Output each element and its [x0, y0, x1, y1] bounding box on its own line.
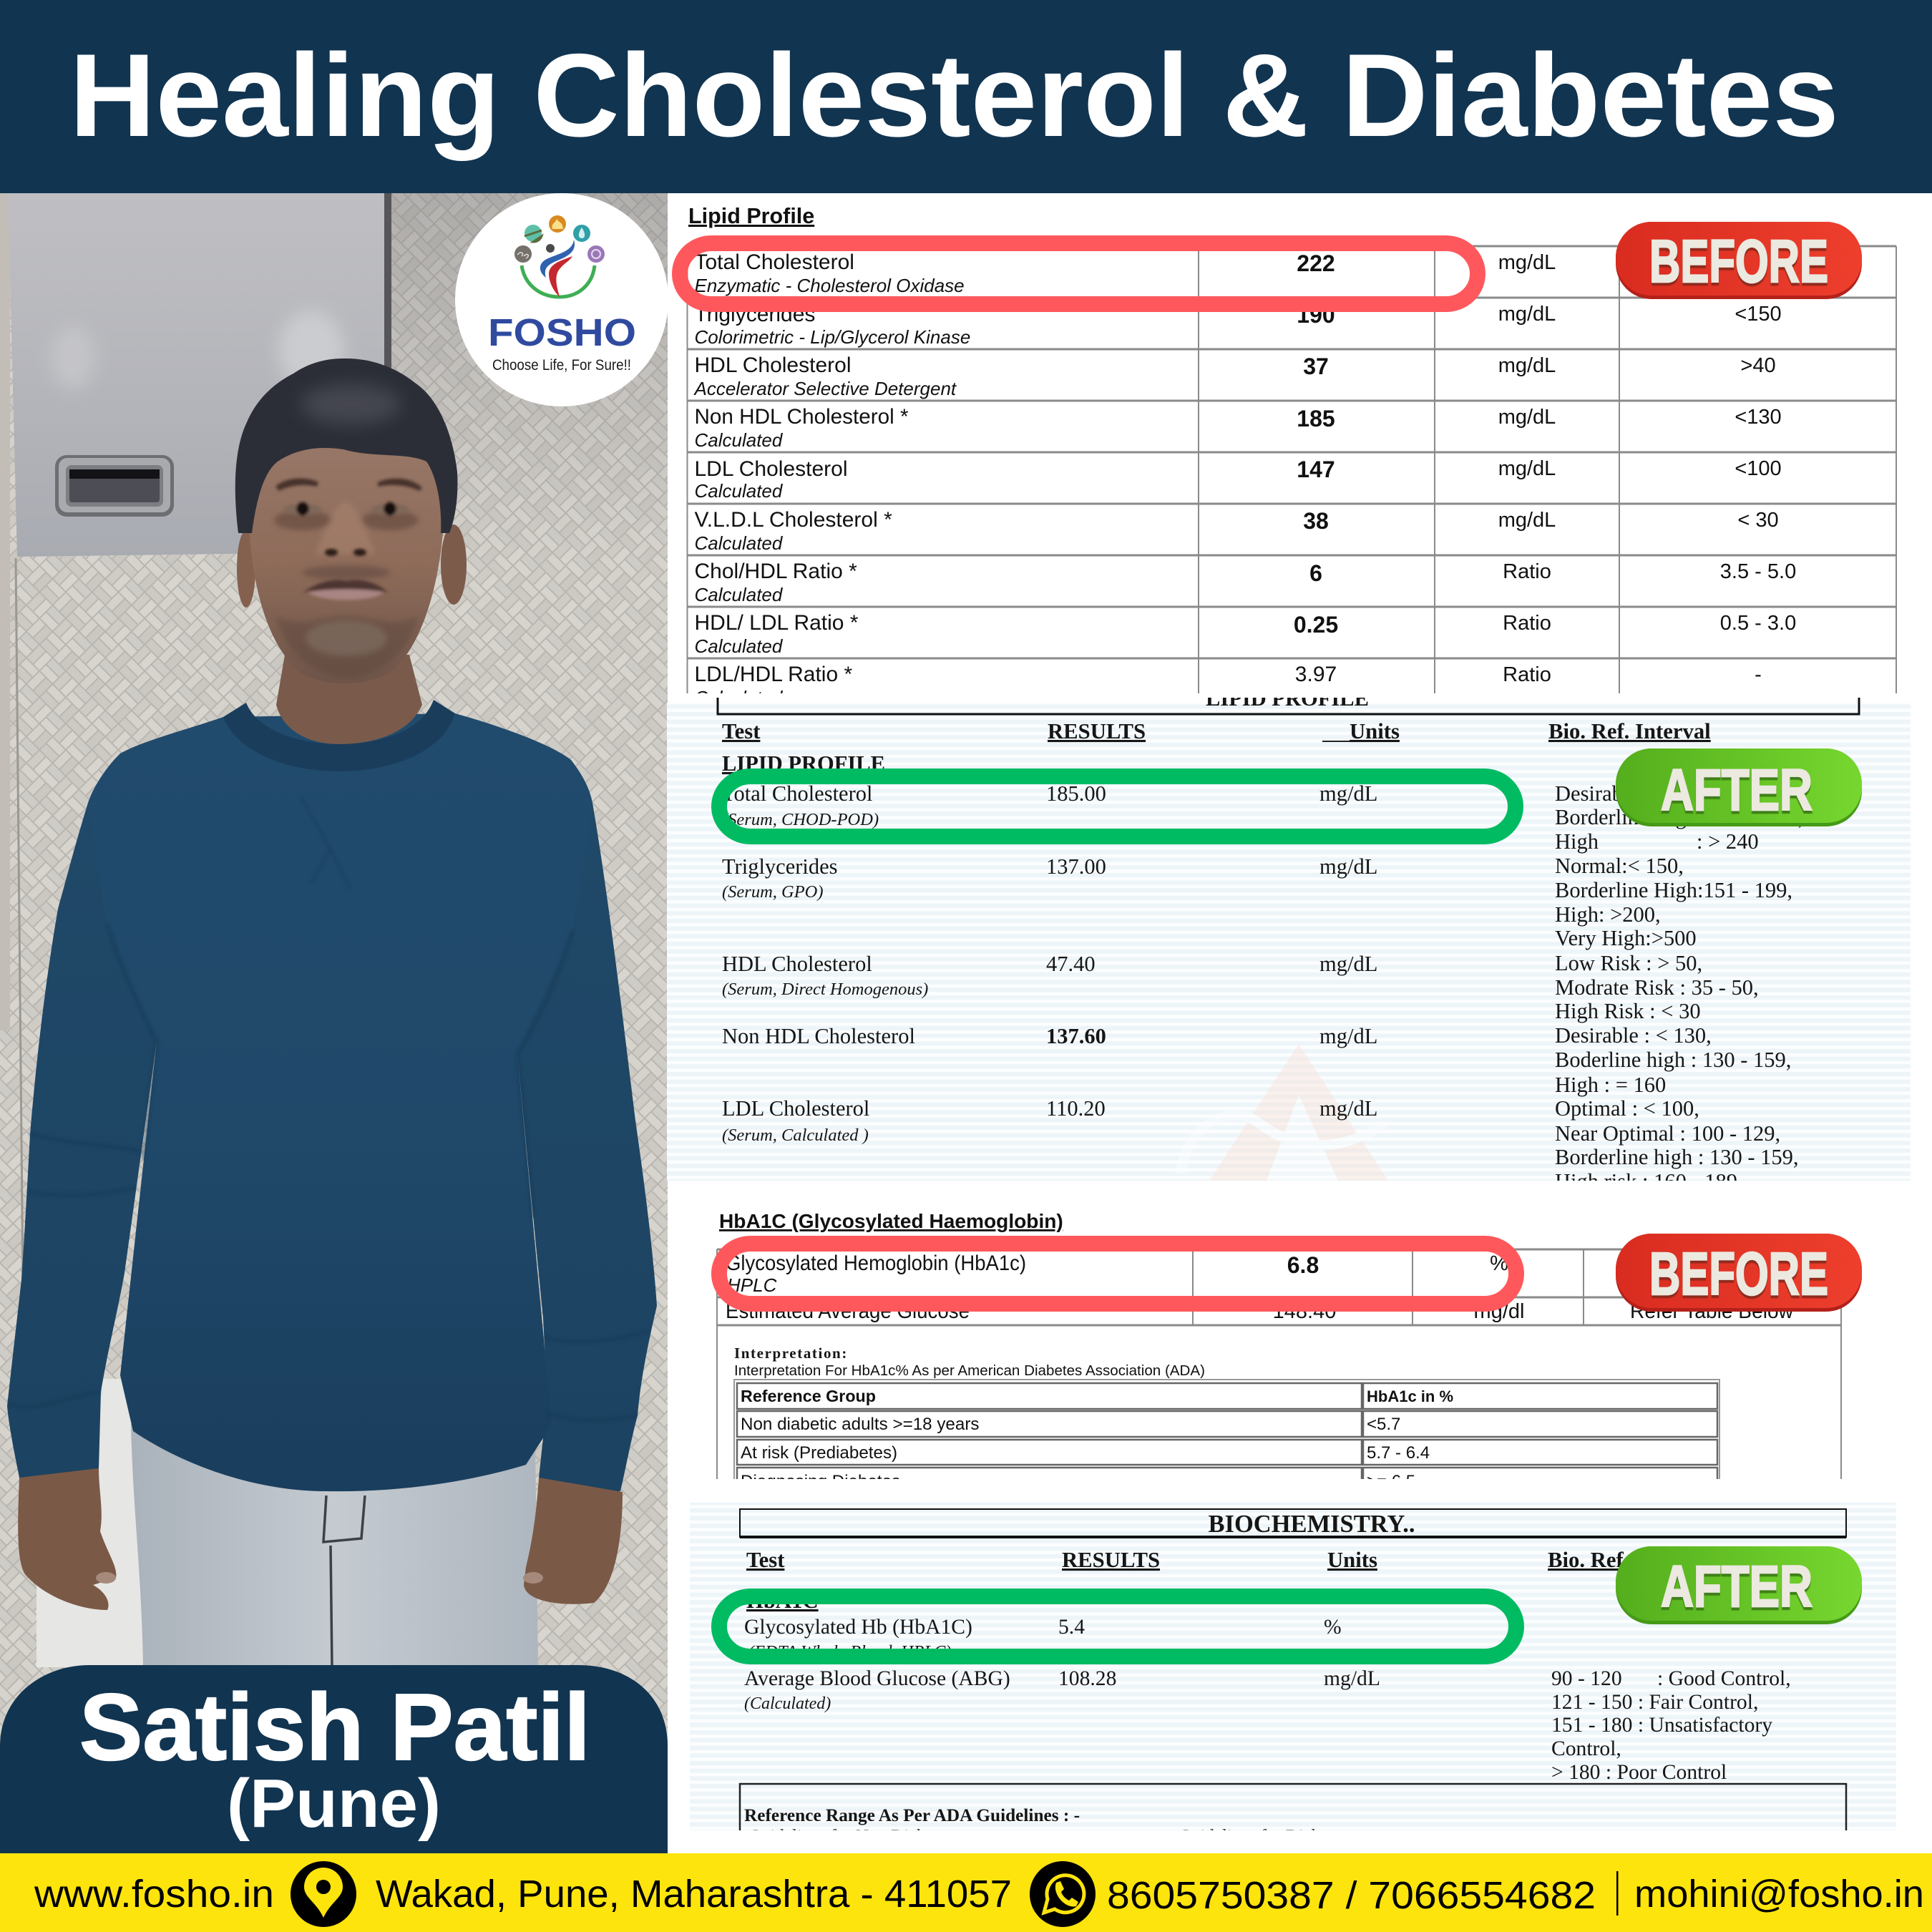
lipid rows: >40	[1740, 354, 1776, 377]
left wall strip	[0, 193, 10, 1030]
header banner	[0, 0, 1932, 193]
after lipid rows: (Serum, Direct Homogenous)	[722, 980, 928, 999]
after lipid rows: Non HDL Cholesterol	[722, 1024, 915, 1048]
lipid rows: <150	[1735, 303, 1782, 326]
after lipid rows	[722, 781, 1377, 1145]
interpretation table	[734, 1380, 1719, 1523]
after lipid rows: Total Cholesterol	[722, 781, 872, 806]
woven wall background	[0, 193, 668, 1853]
after HbA1c rows: 5.4	[1058, 1616, 1085, 1639]
after HbA1c reference intervals: : Good Control,	[1657, 1667, 1791, 1690]
after HbA1c rows	[744, 1616, 1380, 1713]
after HbA1c rows: Glycosylated Hb (HbA1C)	[744, 1616, 972, 1639]
after lipid rows: 110.20	[1046, 1096, 1106, 1121]
highlight ring: after total cholesterol	[719, 776, 1516, 836]
badge: after 2: AFTER	[1661, 1554, 1813, 1619]
after lipid rows: 185.00	[1046, 781, 1106, 806]
after lipid reference intervals: Low Risk : > 50,	[1555, 951, 1702, 975]
after HbA1c header: Bio. Ref. Interval	[1548, 1548, 1710, 1572]
cropped section title	[718, 686, 1859, 714]
nose	[325, 549, 366, 556]
website: www.fosho.in	[34, 1873, 274, 1916]
sweater collar	[223, 700, 455, 771]
badge: before 2: BEFORE	[1649, 1240, 1828, 1307]
after lipid table header: LIPID PROFILE	[722, 751, 885, 776]
after lipid rows: 137.60	[1046, 1024, 1106, 1048]
interpretation text: Interpretation For HbA1c% As per American Diabetes Association (ADA)	[734, 1363, 1205, 1379]
after HbA1c reference intervals	[1551, 1667, 1791, 1784]
cropped section title: LIPID PROFILE	[1206, 686, 1369, 711]
after lipid reference intervals: Normal:< 150,	[1555, 854, 1684, 878]
logo badge	[455, 193, 668, 406]
panel: before lipid report	[687, 204, 1896, 708]
door edge	[384, 193, 391, 369]
HbA1c rows: 148.40	[1273, 1300, 1336, 1323]
patient city: (Pune)	[227, 1765, 441, 1842]
jeans	[131, 1424, 538, 1667]
logo emblem	[514, 215, 605, 297]
sweater folds	[25, 850, 639, 1419]
biochemistry title box	[740, 1509, 1846, 1538]
email: mohini@fosho.in	[1634, 1873, 1924, 1916]
interpretation table: >= 6.5	[1367, 1472, 1415, 1491]
panel: patient name	[0, 1665, 668, 1853]
left wall seam	[14, 558, 24, 1277]
badge: after 1: AFTER	[1661, 758, 1813, 823]
logo tagline: Choose Life, For Sure!!	[492, 357, 631, 374]
interpretation table: Diagnosing Diabetes	[741, 1472, 900, 1491]
after lipid rows: Triglycerides	[722, 854, 838, 879]
badge: before 1	[1616, 222, 1862, 299]
panel: after HbA1c report	[690, 1503, 1896, 1846]
after lipid reference intervals: Borderline High:151 - 199,	[1555, 878, 1792, 902]
lipid rows: Chol/HDL Ratio *	[694, 560, 857, 583]
after lipid table header: RESULTS	[1048, 719, 1146, 743]
hair	[235, 358, 457, 533]
lipid rows: Calculated	[694, 532, 784, 554]
after lipid reference intervals: Modrate Risk : 35 - 50,	[1555, 975, 1759, 1000]
after HbA1c header	[746, 1548, 1710, 1613]
address: Wakad, Pune, Maharashtra - 411057	[376, 1873, 1012, 1916]
after lipid rows: mg/dL	[1319, 1024, 1377, 1048]
logo wordmark: FOSHO	[488, 311, 636, 354]
lipid rows: 147	[1297, 457, 1335, 482]
HbA1c rows: Glycosylated Hemoglobin (HbA1c)	[726, 1252, 1026, 1275]
neck	[276, 655, 422, 744]
after lipid reference intervals: High	[1555, 829, 1599, 854]
lipid rows: LDL Cholesterol	[694, 457, 847, 481]
after HbA1c header: Test	[746, 1548, 785, 1572]
lipid rows: mg/dL	[1498, 251, 1556, 274]
after lipid reference intervals: High risk : 160 - 189	[1555, 1169, 1737, 1194]
lipid rows: Triglycerides	[694, 303, 815, 326]
lipid rows: V.L.D.L Cholesterol *	[694, 508, 892, 532]
after lipid reference intervals	[1555, 781, 1803, 1194]
footer contact bar	[0, 1853, 1932, 1932]
lipid rows: mg/dL	[1498, 303, 1556, 326]
lipid rows	[693, 250, 1796, 708]
after lipid rows: (Serum, CHOD-POD)	[722, 810, 879, 829]
after HbA1c rows: Average Blood Glucose (ABG)	[744, 1667, 1010, 1690]
lipid rows: < 30	[1737, 509, 1779, 532]
after lipid reference intervals: High : = 160	[1555, 1073, 1666, 1097]
HbA1c rows: 6.8	[1287, 1252, 1319, 1278]
lipid rows: 185	[1297, 406, 1335, 431]
after HbA1c reference intervals: 90 - 120	[1551, 1667, 1622, 1690]
HbA1c rows: Estimated Average Glucose	[726, 1299, 970, 1323]
lipid rows: 222	[1297, 250, 1335, 276]
after lipid reference intervals: Very High:>500	[1555, 926, 1697, 950]
after HbA1c rows: %	[1324, 1616, 1342, 1639]
after lipid reference intervals: Borderline High : 200 - 239,	[1555, 805, 1803, 829]
biochemistry title box: BIOCHEMISTRY..	[1209, 1511, 1415, 1538]
lipid rows: HDL Cholesterol	[694, 353, 851, 377]
after HbA1c rows: 108.28	[1058, 1667, 1116, 1690]
lipid rows: mg/dL	[1498, 509, 1556, 532]
lipid rows: Ratio	[1503, 560, 1551, 583]
lipid rows: Calculated	[694, 429, 784, 451]
after lipid reference intervals: Boderline high : 130 - 159,	[1555, 1048, 1791, 1072]
lipid rows: Colorimetric - Lip/Glycerol Kinase	[694, 326, 970, 348]
interpretation text	[734, 1345, 1205, 1379]
after lipid rows: LDL Cholesterol	[722, 1096, 869, 1121]
after HbA1c header: Units	[1327, 1548, 1377, 1572]
after lipid rows: HDL Cholesterol	[722, 952, 872, 976]
HbA1c rows: Refer Table Below	[1630, 1300, 1794, 1323]
after HbA1c header: HbA1C	[746, 1589, 819, 1613]
after lipid rows: 137.00	[1046, 854, 1106, 879]
lipid rows: Calculated	[694, 480, 784, 502]
badge: before 2	[1616, 1234, 1862, 1312]
after lipid rows: mg/dL	[1319, 1096, 1377, 1121]
lipid rows: mg/dL	[1498, 406, 1556, 429]
after lipid rows: (Serum, Calculated )	[722, 1126, 869, 1145]
after lipid table header: Bio. Ref. Interval	[1548, 719, 1711, 743]
lipid rows: Ratio	[1503, 663, 1551, 686]
after HbA1c rows: mg/dL	[1324, 1667, 1380, 1690]
icon: whatsapp	[1030, 1861, 1096, 1927]
after lipid rows: mg/dL	[1319, 952, 1377, 976]
ADA guidelines box: Guidelines for Diabetes	[1179, 1827, 1348, 1846]
after lipid reference intervals: High Risk : < 30	[1555, 999, 1701, 1023]
left ear	[237, 530, 255, 608]
after lipid table header	[722, 719, 1711, 776]
phone numbers: 8605750387 / 7066554682	[1107, 1874, 1596, 1917]
lipid rows: 3.5 - 5.0	[1720, 560, 1796, 583]
lipid rows: 38	[1303, 508, 1329, 534]
title: Healing Cholesterol & Diabetes	[69, 29, 1839, 161]
after HbA1c reference intervals: 121 - 150 : Fair Control,	[1551, 1691, 1758, 1714]
highlight ring: after HbA1c	[719, 1596, 1516, 1657]
lipid rows: Non HDL Cholesterol *	[694, 405, 909, 429]
badge: before 1: BEFORE	[1649, 228, 1828, 295]
ADA guidelines box: Reference Range As Per ADA Guidelines : -	[744, 1805, 1080, 1825]
right hand	[523, 1478, 623, 1604]
door handle	[55, 455, 174, 517]
lipid rows: 37	[1303, 353, 1329, 379]
grey door panel	[8, 193, 384, 557]
after lipid table header: Test	[722, 719, 761, 743]
photo: patient portrait	[0, 193, 668, 1853]
lipid rows: Calculated	[694, 635, 784, 657]
after lipid rows: (Serum, GPO)	[722, 882, 824, 902]
lipid rows: Ratio	[1503, 612, 1551, 635]
interpretation text: Interpretation:	[734, 1345, 848, 1362]
lipid rows: -	[1755, 663, 1762, 686]
lower white door	[36, 1379, 155, 1667]
lipid rows: mg/dL	[1498, 354, 1556, 377]
sweater torso	[88, 713, 592, 1491]
after HbA1c reference intervals: > 180 : Poor Control	[1551, 1761, 1727, 1784]
lipid rows: 0.5 - 3.0	[1720, 612, 1796, 635]
after lipid reference intervals: Near Optimal : 100 - 129,	[1555, 1121, 1780, 1146]
HbA1c rows	[726, 1252, 1794, 1323]
after HbA1c header: RESULTS	[1062, 1548, 1160, 1572]
after lipid reference intervals: Borderline high : 130 - 159,	[1555, 1145, 1799, 1169]
HbA1c rows: mg/dl	[1474, 1300, 1524, 1323]
lipid rows: Enzymatic - Cholesterol Oxidase	[694, 275, 965, 296]
lipid rows: 3.97	[1295, 663, 1337, 686]
lipid rows: Total Cholesterol	[694, 250, 854, 274]
after HbA1c rows: (EDTA Whole Blood, HPLC)	[748, 1642, 952, 1662]
after lipid rows: mg/dL	[1319, 781, 1377, 806]
interpretation table: <5.7	[1367, 1415, 1400, 1434]
lipid rows: <130	[1735, 406, 1782, 429]
sweater right arm	[517, 803, 657, 1491]
after HbA1c reference intervals: 151 - 180 : Unsatisfactory	[1551, 1714, 1772, 1737]
ADA guidelines box	[740, 1784, 1846, 1846]
eyebrows	[275, 479, 422, 491]
right eye	[371, 502, 409, 515]
lipid rows: 6	[1309, 560, 1322, 586]
highlight ring: before HbA1c	[719, 1244, 1516, 1304]
interpretation table: At risk (Prediabetes)	[741, 1443, 897, 1463]
left eye	[284, 502, 321, 515]
HbA1c rows: %	[1490, 1252, 1508, 1275]
after lipid table header: Units	[1350, 719, 1400, 743]
interpretation table: HbA1c in %	[1367, 1387, 1453, 1405]
wall tone top right	[391, 193, 668, 484]
icon: location pin	[291, 1861, 356, 1927]
highlight ring: before total cholesterol	[680, 243, 1478, 304]
lipid rows: Calculated	[694, 584, 784, 605]
patient name: Satish Patil	[79, 1674, 590, 1780]
after lipid reference intervals: Desirable : < 130,	[1555, 1023, 1712, 1048]
face	[250, 448, 443, 683]
interpretation table: 5.7 - 6.4	[1367, 1443, 1430, 1463]
lipid rows: LDL/HDL Ratio *	[694, 663, 852, 686]
lipid rows: 190	[1297, 302, 1335, 328]
after lipid reference intervals: : > 240	[1697, 829, 1759, 854]
badge: after 1	[1616, 748, 1862, 826]
after lipid reference intervals: High: >200,	[1555, 902, 1661, 927]
after lipid rows: 47.40	[1046, 952, 1096, 976]
striped paper background	[667, 703, 1911, 1181]
mouth	[303, 580, 388, 600]
HbA1c rows: HPLC	[727, 1274, 777, 1296]
striped paper background	[690, 1503, 1896, 1830]
door reflections	[52, 311, 344, 391]
HbA1c table grid	[717, 1249, 1841, 1479]
HbA1c heading: HbA1C (Glycosylated Haemoglobin)	[719, 1210, 1063, 1232]
after HbA1c reference intervals: Control,	[1551, 1737, 1621, 1760]
interpretation table: Non diabetic adults >=18 years	[741, 1415, 979, 1434]
lipid table grid	[687, 246, 1896, 693]
after lipid rows: mg/dL	[1319, 854, 1377, 879]
lipid rows: 0.25	[1294, 612, 1338, 638]
sweater left arm	[7, 803, 157, 1480]
lipid heading: Lipid Profile	[688, 204, 814, 228]
lipid rows: <100	[1735, 457, 1782, 480]
panel: before HbA1c report	[717, 1210, 1841, 1523]
lipid rows: Calculated	[694, 687, 784, 708]
badge: after 2	[1616, 1546, 1862, 1624]
after HbA1c rows: (Calculated)	[744, 1694, 831, 1713]
lipid rows: Accelerator Selective Detergent	[693, 378, 957, 399]
after lipid reference intervals: Desirable : < 200,	[1555, 781, 1712, 806]
lipid rows: mg/dL	[1498, 457, 1556, 480]
after lipid reference intervals: Optimal : < 100,	[1555, 1096, 1699, 1121]
right ear	[441, 525, 467, 605]
panel: after lipid report	[667, 686, 1911, 1194]
face shading and stubble	[274, 501, 419, 678]
interpretation table: Reference Group	[741, 1387, 876, 1405]
watermark	[1181, 1044, 1388, 1181]
left hand	[18, 1468, 116, 1610]
lipid rows: HDL/ LDL Ratio *	[694, 611, 859, 635]
ADA guidelines box: Guidelines for Non Diabetes	[748, 1827, 954, 1846]
